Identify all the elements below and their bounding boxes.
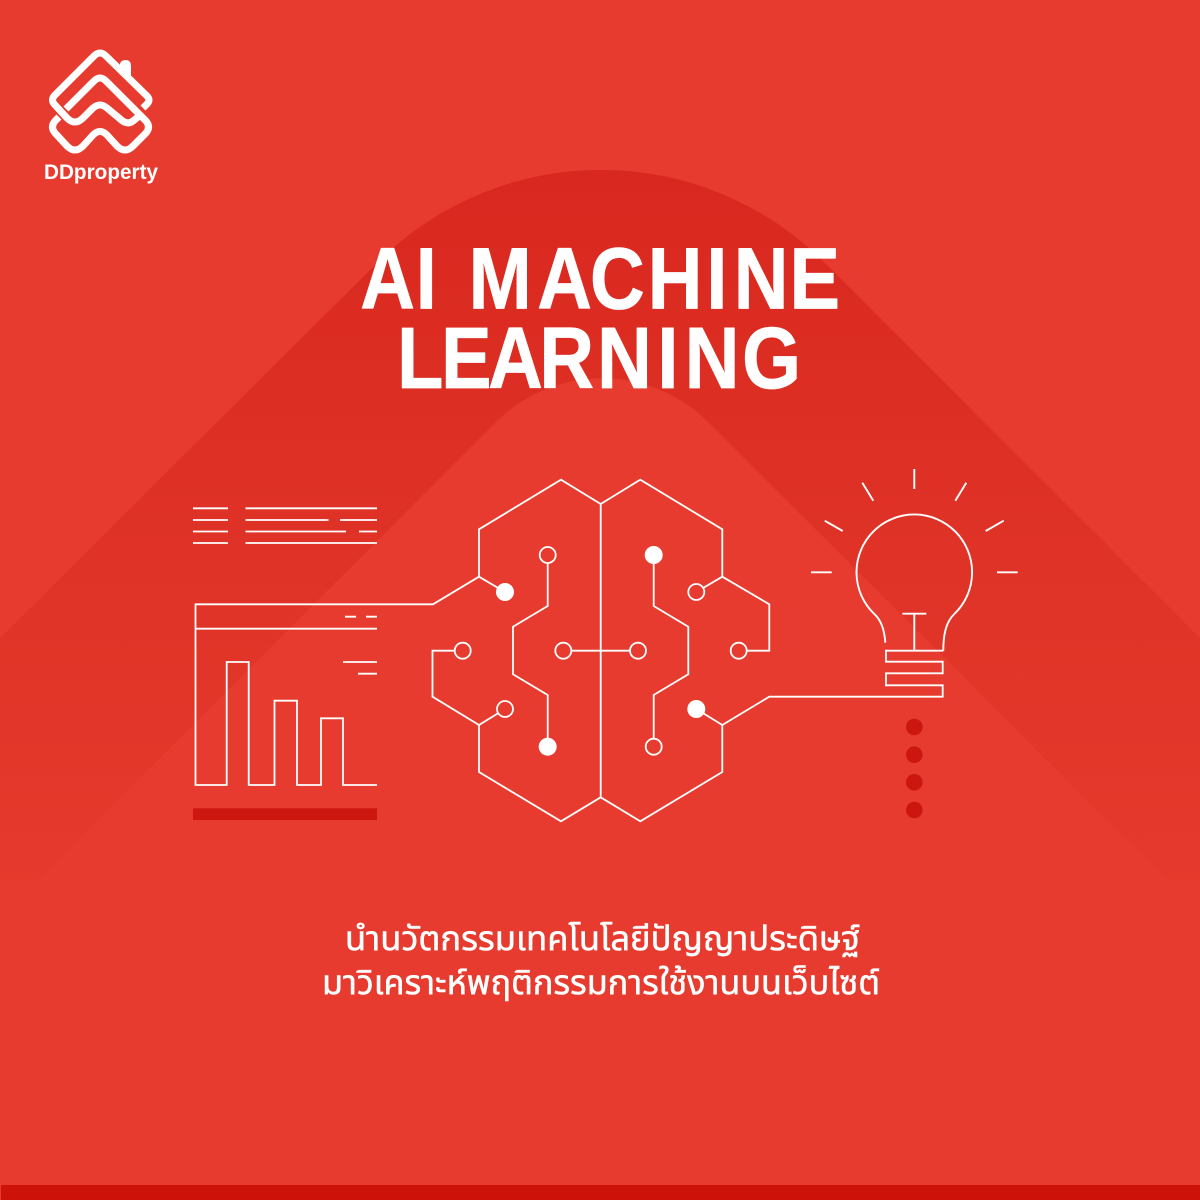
legend lines — [343, 662, 377, 674]
centre link — [563, 650, 638, 652]
bar chart window — [196, 577, 479, 785]
filled nodes — [496, 546, 705, 756]
subtitle: นำนวัตกรรมเทคโนโลยีปัญญาประดิษฐ์ — [345, 920, 860, 958]
dotted column — [906, 719, 923, 818]
right hemisphere outline — [601, 480, 722, 592]
logo wordmark: DDproperty — [44, 160, 158, 184]
left inner circuit — [513, 555, 548, 747]
header dashes — [345, 616, 377, 618]
background: outer rounded peak — [0, 170, 1200, 880]
title: AI MACHINE — [360, 231, 840, 328]
subtitle: มาวิเคราะห์พฤติกรรมการใช้งานบนเว็บไซต์ — [322, 964, 880, 1002]
filament — [902, 614, 926, 651]
text lines icon — [193, 508, 377, 543]
logo: DDproperty — [44, 53, 158, 184]
midline — [600, 504, 602, 797]
left hemisphere outline — [479, 480, 601, 592]
connector to bulb — [722, 651, 943, 725]
header line — [196, 628, 377, 630]
subtitle — [322, 920, 880, 1002]
title — [360, 231, 840, 407]
bulb glass — [856, 514, 972, 651]
red bar under chart — [193, 808, 377, 820]
bottom bar — [1, 1185, 1200, 1200]
background: inner rounded peak — [0, 378, 1200, 1185]
logo icon — [52, 53, 149, 150]
brain circuit — [432, 480, 943, 821]
window frame and connector — [196, 577, 479, 785]
light rays — [811, 469, 1018, 572]
open nodes — [455, 547, 747, 755]
right inner circuit — [654, 555, 688, 747]
title: LEARNING — [397, 310, 801, 407]
icon: light bulb — [811, 469, 1018, 651]
